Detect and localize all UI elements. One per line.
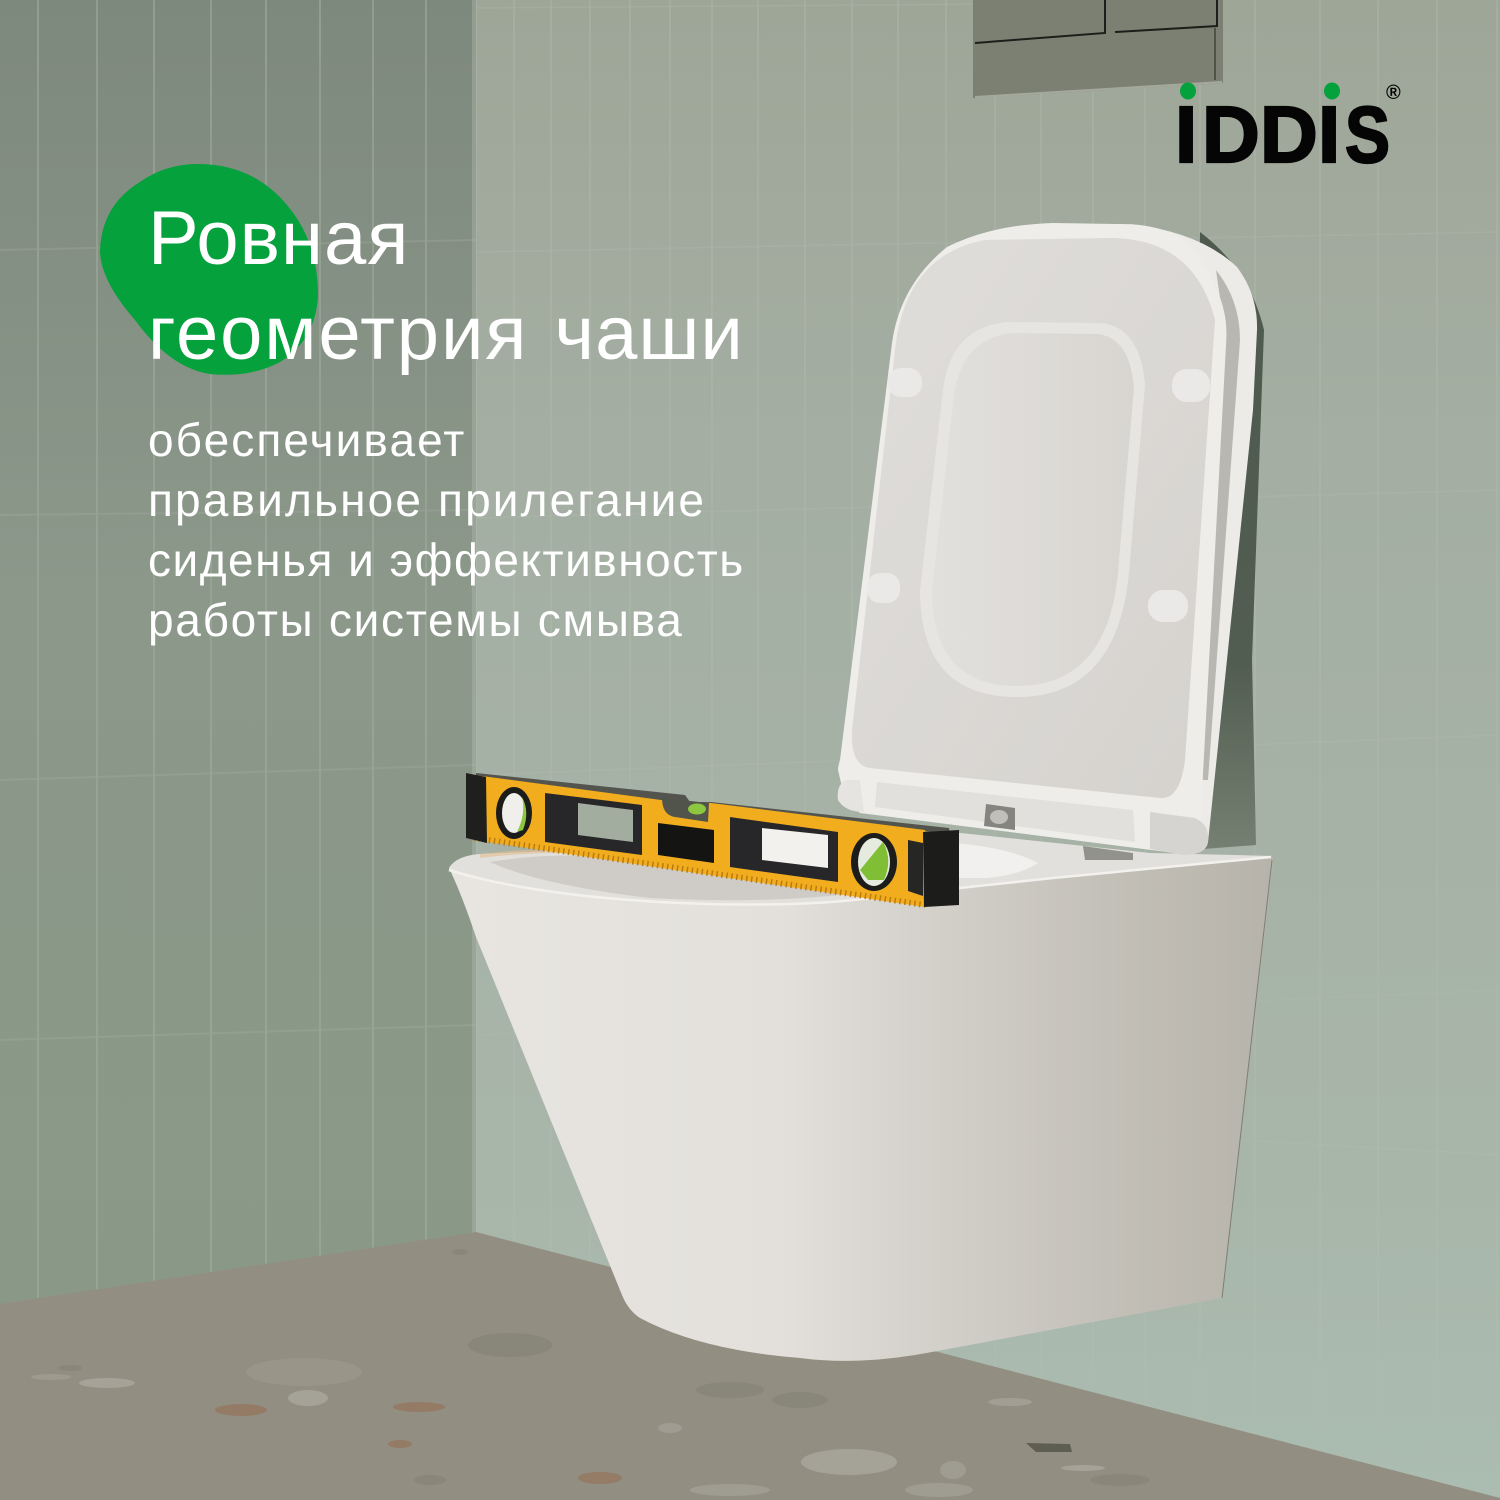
level end cap left bbox=[466, 773, 487, 843]
flush plate bbox=[973, 0, 1223, 98]
lid recess bbox=[852, 238, 1215, 798]
seat opening ring bbox=[920, 322, 1145, 697]
bowl rim edge bbox=[449, 857, 1271, 905]
spirit level bbox=[466, 773, 959, 907]
logo wordmark: S bbox=[1345, 90, 1390, 179]
hinge knob left bbox=[838, 780, 864, 812]
level handle right bbox=[730, 817, 838, 882]
logo bbox=[1175, 82, 1401, 179]
toilet bowl bbox=[449, 833, 1273, 1361]
subheading text: обеспечивает bbox=[148, 414, 466, 466]
level yellow body bbox=[474, 775, 925, 907]
subheading text: сиденья и эффективность bbox=[148, 534, 745, 586]
bowl rim top bbox=[449, 833, 1272, 905]
subheading text: работы системы смыва bbox=[148, 594, 684, 646]
level handle left bbox=[545, 793, 642, 855]
bowl opening bbox=[955, 843, 1038, 878]
logo wordmark: IDDI bbox=[1175, 90, 1340, 179]
subheading text: правильное прилегание bbox=[148, 474, 706, 526]
seat buffers bbox=[867, 368, 1210, 622]
green blob bbox=[100, 164, 318, 375]
left wall bbox=[0, 0, 477, 1310]
heading: Ровная bbox=[148, 196, 409, 281]
heading: геометрия чаши bbox=[148, 291, 744, 376]
right wall bbox=[476, 0, 1500, 1500]
lid rim bbox=[838, 223, 1226, 854]
toilet seat lid bbox=[838, 223, 1257, 855]
level clip right bbox=[908, 840, 923, 896]
level end cap right bbox=[923, 830, 959, 907]
hinge bar bbox=[875, 782, 1135, 842]
level vial right bbox=[851, 833, 897, 891]
logo dot right bbox=[1324, 82, 1340, 100]
registered mark: ® bbox=[1386, 82, 1401, 104]
level top vial bbox=[662, 798, 709, 822]
level top face bbox=[476, 773, 950, 834]
level vial left bbox=[496, 787, 532, 839]
subheading text bbox=[148, 414, 745, 646]
level center window bbox=[658, 823, 714, 863]
hinge knob right bbox=[1150, 812, 1208, 855]
level ruler bbox=[474, 838, 925, 905]
heading bbox=[148, 196, 744, 376]
floor bbox=[0, 1232, 1500, 1500]
shadow behind seat bbox=[1190, 232, 1264, 850]
seat opening panel bbox=[932, 333, 1134, 686]
back lid edge bbox=[1130, 224, 1257, 842]
hinge metal bbox=[984, 804, 1015, 830]
wall-mount hinge bbox=[1083, 846, 1133, 860]
logo dot left bbox=[1180, 82, 1196, 100]
